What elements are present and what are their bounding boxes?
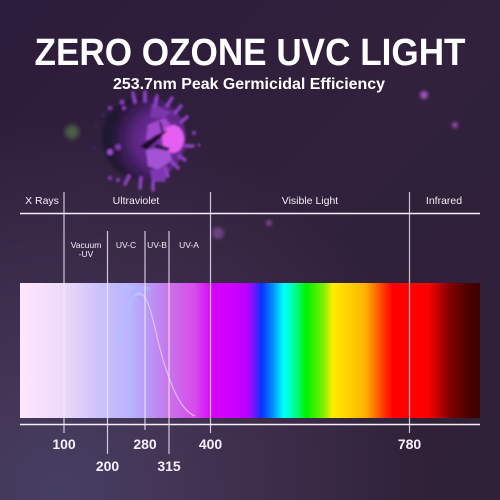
spectrum bar: [20, 283, 480, 418]
uv sub-band labels: UV-B: [147, 240, 167, 250]
wavelength numbers: 315: [157, 458, 181, 474]
uv sub-band labels: UV-C: [116, 240, 136, 250]
virus illustration: [92, 92, 200, 190]
band labels: Infrared: [426, 195, 462, 207]
wavelength numbers: 100: [52, 436, 76, 452]
uv sub-band labels: [71, 240, 199, 259]
efficiency curve: [119, 286, 195, 416]
uv sub-band labels: UV-A: [179, 240, 199, 250]
wavelength numbers: [52, 436, 421, 474]
band labels: Ultraviolet: [113, 195, 159, 207]
band labels: Visible Light: [282, 195, 338, 207]
wavelength numbers: 280: [133, 436, 157, 452]
title: ZERO OZONE UVC LIGHT: [34, 32, 466, 74]
wavelength numbers: 400: [199, 436, 222, 452]
uv sub-band labels: -UV: [79, 249, 94, 259]
floating particles: [65, 91, 458, 239]
band labels: [25, 195, 462, 207]
peak label: 253.7nm: [123, 286, 151, 293]
wavelength numbers: 780: [398, 436, 421, 452]
band labels: X Rays: [25, 195, 59, 207]
uv sub-band labels: Vacuum: [71, 240, 101, 250]
axis lines: [20, 192, 480, 454]
subtitle: 253.7nm Peak Germicidal Efficiency: [113, 76, 385, 93]
wavelength numbers: 200: [96, 458, 119, 474]
